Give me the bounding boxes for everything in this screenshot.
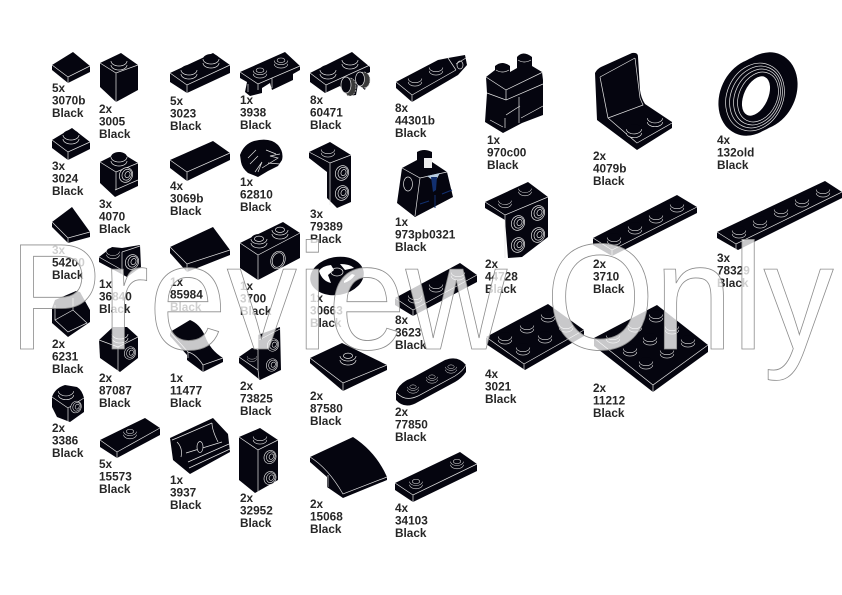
part: 54200: Black	[52, 268, 84, 282]
part: 44728: 2x	[485, 257, 499, 271]
part: 34103: 4x	[395, 501, 409, 515]
part: 3069b	[170, 141, 230, 218]
part: 3700: Black	[240, 304, 272, 318]
part: 3069b: 4x	[170, 179, 184, 193]
part: 87087: 2x	[99, 371, 113, 385]
part: 3070b: Black	[52, 106, 84, 120]
part: 3069b: 3069b	[170, 192, 203, 206]
part: 15068	[310, 437, 387, 536]
part: 3386: 2x	[52, 421, 66, 435]
part: 15573: 15573	[99, 470, 132, 484]
part: 3623: 8x	[395, 313, 409, 327]
part: 78329: 78329	[717, 264, 750, 278]
part: 73825: Black	[240, 404, 272, 418]
part: 60471: 60471	[310, 106, 343, 120]
part: 79389	[309, 142, 351, 246]
part: 15068: Black	[310, 522, 342, 536]
part: 87580: 2x	[310, 389, 324, 403]
part: 3700	[240, 222, 300, 318]
part: 3386	[52, 385, 84, 460]
part: 87580: 87580	[310, 402, 343, 416]
part: 11477: 11477	[170, 384, 203, 398]
part: 3069b: Black	[170, 204, 202, 218]
part: 32952: 32952	[240, 504, 273, 518]
part: 973pb0321: 973pb0321	[395, 228, 456, 242]
part: 73825	[239, 327, 281, 418]
part: 3021	[485, 304, 584, 406]
part: 3070b	[52, 52, 90, 120]
part: 85984: 1x	[170, 275, 184, 289]
part: 54200: 3x	[52, 243, 66, 257]
part: 3024: 3x	[52, 159, 66, 173]
part: 970c00: Black	[487, 158, 519, 172]
part: 4070: 4070	[99, 210, 126, 224]
part: 3021: Black	[485, 392, 517, 406]
part: 4079b: 4079b	[593, 162, 626, 176]
part: 79389: 79389	[310, 220, 343, 234]
part: 4079b: Black	[593, 174, 625, 188]
part: 44728	[485, 182, 548, 296]
part: 60471: 8x	[310, 93, 324, 107]
part: 62810: 62810	[240, 188, 273, 202]
part: 36840	[99, 245, 141, 316]
part: 3710	[593, 195, 697, 296]
part: 3070b: 5x	[52, 81, 66, 95]
watermark: Preview Only: Preview Only	[9, 212, 834, 381]
part: 32952	[239, 428, 278, 530]
part: 3710: 2x	[593, 257, 607, 271]
part: 15573: 5x	[99, 457, 113, 471]
part: 4070	[99, 152, 138, 236]
part: 3710: 3710	[593, 270, 620, 284]
part: 3024: 3024	[52, 172, 79, 186]
part: 973pb0321: Black	[395, 240, 427, 254]
part: 44301b	[395, 55, 467, 140]
part: 36840: 36840	[99, 290, 132, 304]
part: 970c00	[485, 54, 543, 172]
part: 3938: 3938	[240, 106, 267, 120]
part: 87087: Black	[99, 396, 131, 410]
part: 73825: 2x	[240, 379, 254, 393]
part: 87087: 87087	[99, 384, 132, 398]
part: 6231	[52, 291, 90, 376]
part: 77850	[395, 358, 466, 444]
part: 973pb0321: 1x	[395, 215, 409, 229]
part: 87087	[99, 327, 138, 410]
part: 44301b: 44301b	[395, 114, 435, 128]
part: 4079b: 2x	[593, 149, 607, 163]
part: 3938	[240, 52, 300, 132]
part: 11477: 1x	[170, 371, 184, 385]
part: 132old: Black	[717, 158, 749, 172]
part: 44301b: 8x	[395, 101, 409, 115]
part: 3005: 2x	[99, 102, 113, 116]
part: 3070b: 3070b	[52, 94, 85, 108]
part: 3021: 3021	[485, 380, 512, 394]
part: 11212: 11212	[593, 394, 626, 408]
part: 30663	[307, 253, 367, 330]
part: 3005: 3005	[99, 114, 126, 128]
part: 85984	[170, 227, 230, 314]
part: 6231: 6231	[52, 350, 79, 364]
part: 4079b	[593, 53, 672, 188]
part: 15068: 2x	[310, 497, 324, 511]
part: 34103	[395, 452, 477, 540]
part: 3623	[395, 263, 477, 352]
part: 3023: 3023	[170, 106, 197, 120]
part: 36840: Black	[99, 302, 131, 316]
part: 34103: 34103	[395, 514, 428, 528]
part: 3937: 1x	[170, 473, 184, 487]
part: 77850: Black	[395, 430, 427, 444]
part: 3021: 4x	[485, 367, 499, 381]
part: 3623: 3623	[395, 326, 422, 340]
part: 3700: 1x	[240, 279, 254, 293]
part: 3938: Black	[240, 118, 272, 132]
part: 4070: 3x	[99, 197, 113, 211]
part: 11212: 2x	[593, 381, 607, 395]
part: 3710: Black	[593, 282, 625, 296]
part: 73825: 73825	[240, 392, 273, 406]
part: 3937: 3937	[170, 486, 197, 500]
part: 3937: Black	[170, 498, 202, 512]
part: 132old	[706, 41, 810, 172]
part: 85984: Black	[170, 300, 202, 314]
part: 62810: Black	[240, 200, 272, 214]
part: 3005: Black	[99, 127, 131, 141]
part: 4070: Black	[99, 222, 131, 236]
part: 78329: 3x	[717, 251, 731, 265]
part: 15573: Black	[99, 482, 131, 496]
part: 3700: 3700	[240, 292, 267, 306]
part: 15573	[99, 418, 160, 496]
part: 30663: 30663	[310, 304, 343, 318]
part: 11212	[593, 305, 708, 420]
part: 6231: Black	[52, 362, 84, 376]
part: 3386: Black	[52, 446, 84, 460]
part: 34103: Black	[395, 526, 427, 540]
part: 6231: 2x	[52, 337, 66, 351]
part: 3023: 5x	[170, 94, 184, 108]
part: 44301b: Black	[395, 126, 427, 140]
part: 60471: Black	[310, 118, 342, 132]
part: 11212: Black	[593, 406, 625, 420]
part: 30663: Black	[310, 316, 342, 330]
part: 44728: Black	[485, 282, 517, 296]
part: 36840: 1x	[99, 277, 113, 291]
part: 15068: 15068	[310, 510, 343, 524]
part: 32952: Black	[240, 516, 272, 530]
part: 85984: 85984	[170, 288, 203, 302]
part: 62810: 1x	[240, 175, 254, 189]
part: 3024: Black	[52, 184, 84, 198]
part: 32952: 2x	[240, 491, 254, 505]
part: 3024	[52, 128, 90, 198]
part: 60471	[310, 52, 370, 132]
part: 3386: 3386	[52, 434, 79, 448]
part: 78329: Black	[717, 276, 749, 290]
part: 77850: 77850	[395, 418, 428, 432]
part: 54200	[52, 207, 90, 282]
part: 87580: Black	[310, 414, 342, 428]
part: 3023: Black	[170, 119, 202, 133]
part: 44728: 44728	[485, 270, 518, 284]
part: 970c00: 970c00	[487, 146, 527, 160]
part: 3937	[170, 418, 230, 512]
part: 970c00: 1x	[487, 133, 501, 147]
part: 54200: 54200	[52, 256, 85, 270]
part: 3623: Black	[395, 338, 427, 352]
part: 132old: 132old	[717, 146, 754, 160]
part: 30663: 1x	[310, 291, 324, 305]
part: 132old: 4x	[717, 133, 731, 147]
part: 3005	[99, 53, 138, 141]
part: 11477	[170, 320, 223, 410]
part: 87580	[310, 343, 387, 428]
part: 11477: Black	[170, 396, 202, 410]
part: 79389: 3x	[310, 207, 324, 221]
part: 62810	[240, 140, 282, 214]
part: 79389: Black	[310, 232, 342, 246]
part: 3938: 1x	[240, 93, 254, 107]
part: 77850: 2x	[395, 405, 409, 419]
part: 3023	[170, 53, 230, 133]
part: 973pb0321	[395, 150, 456, 254]
part: 78329	[717, 181, 842, 290]
